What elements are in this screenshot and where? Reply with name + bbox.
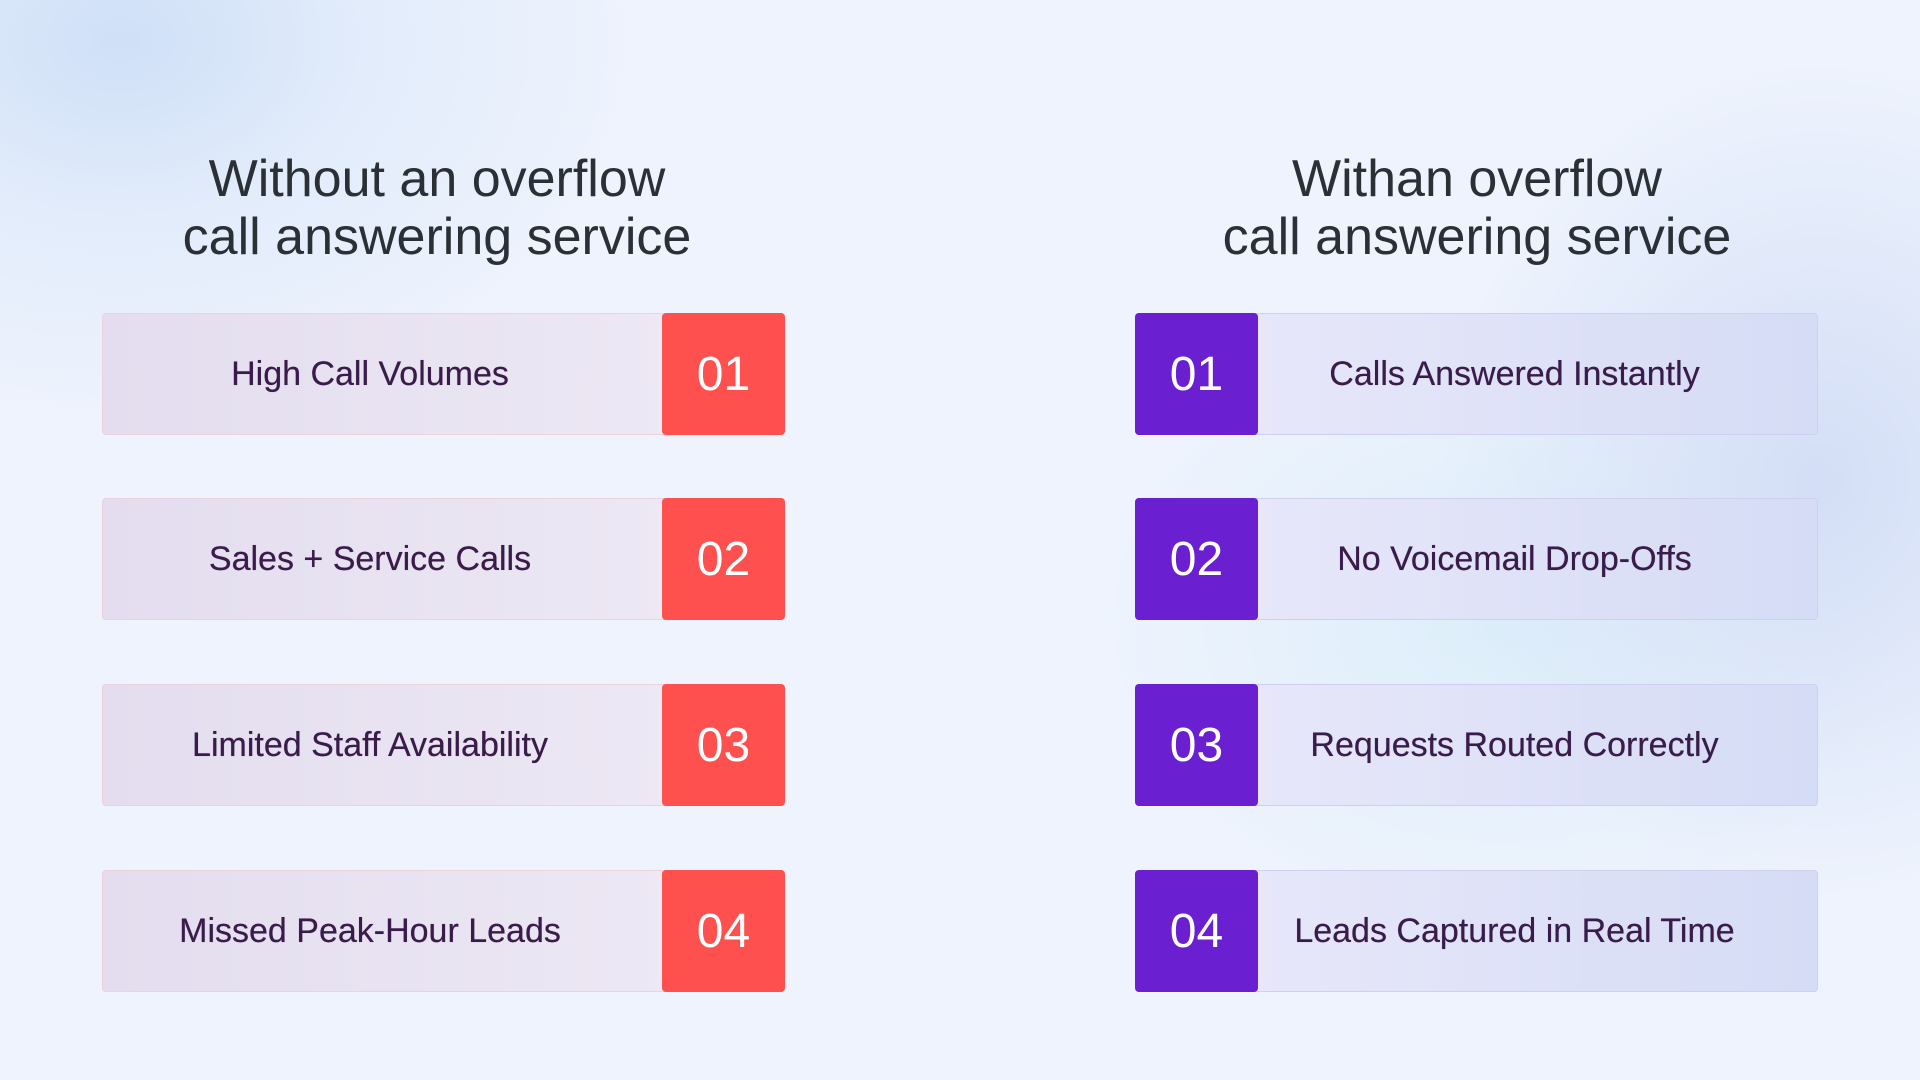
title: without: Without an overflow [209, 150, 665, 208]
title: with: Withan overflow [1292, 150, 1662, 208]
left card 1: High Call Volumes [231, 354, 509, 392]
left card 4: Missed Peak-Hour Leads [179, 912, 561, 950]
title: with [1223, 150, 1731, 266]
left card 2: 02 [697, 532, 750, 586]
right card 4: Leads Captured in Real Time [1294, 912, 1735, 950]
right card 1: 01 [1170, 348, 1223, 400]
left card 3 [102, 684, 785, 806]
left card 2 [102, 498, 785, 620]
right card 3: Requests Routed Correctly [1310, 726, 1719, 764]
right card 1: Calls Answered Instantly [1329, 354, 1700, 392]
right card 2: 02 [1170, 532, 1223, 586]
title: with: call answering service [1223, 208, 1731, 266]
left card 4: 04 [697, 904, 750, 958]
left card 1: 01 [697, 348, 750, 400]
right card 3 [1135, 684, 1818, 806]
right card 2: No Voicemail Drop-Offs [1337, 540, 1692, 578]
left card 3: 03 [697, 718, 750, 772]
left card 2: Sales + Service Calls [209, 540, 531, 578]
right card 4: 04 [1170, 904, 1223, 958]
right card 2 [1135, 498, 1818, 620]
left card 1 [102, 313, 785, 435]
left card 3: Limited Staff Availability [192, 726, 548, 764]
right card 1 [1135, 313, 1818, 435]
title: without [183, 150, 691, 266]
left card 4 [102, 870, 785, 992]
right card 3: 03 [1170, 718, 1223, 772]
right card 4 [1135, 870, 1818, 992]
title: without: call answering service [183, 208, 691, 266]
